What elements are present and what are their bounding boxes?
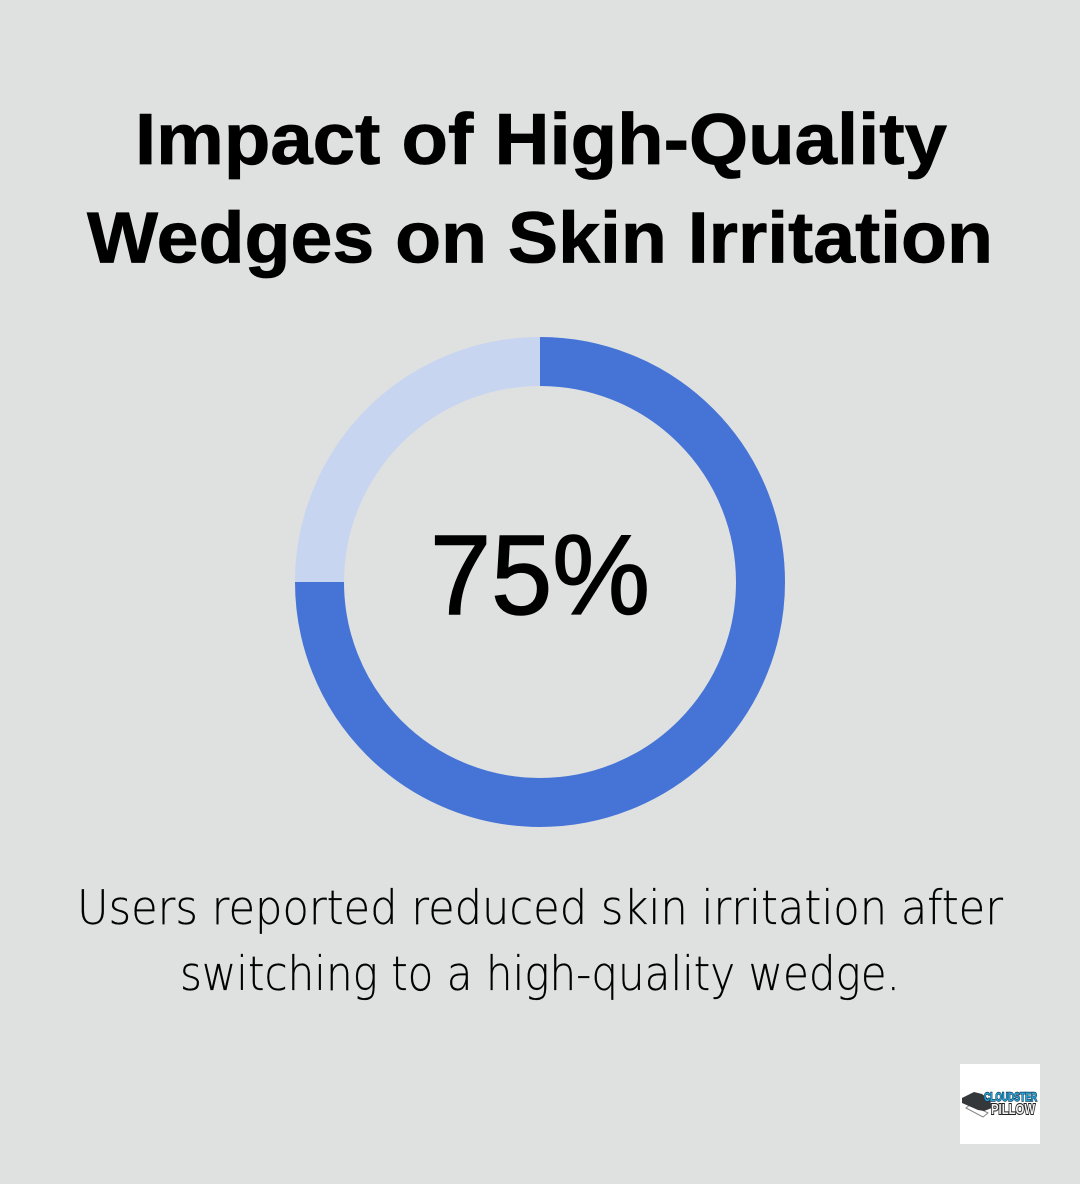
icon: pillow: [962, 1092, 992, 1117]
description: switching to a high-quality wedge.: [180, 947, 900, 1002]
description: Users reported reduced skin irritation after: [77, 881, 1004, 936]
title: Wedges on Skin Irritation: [87, 198, 993, 278]
description: [77, 881, 1004, 1002]
logo: [960, 1064, 1040, 1144]
donut chart: 75%: [320, 362, 760, 802]
logo text: PILLOW: [991, 1101, 1036, 1118]
donut value: 75%: [430, 512, 650, 638]
logo text: CLOUDSTER: [984, 1090, 1037, 1104]
title: [87, 100, 993, 278]
logo text: [984, 1090, 1037, 1118]
title: Impact of High-Quality: [135, 100, 947, 180]
